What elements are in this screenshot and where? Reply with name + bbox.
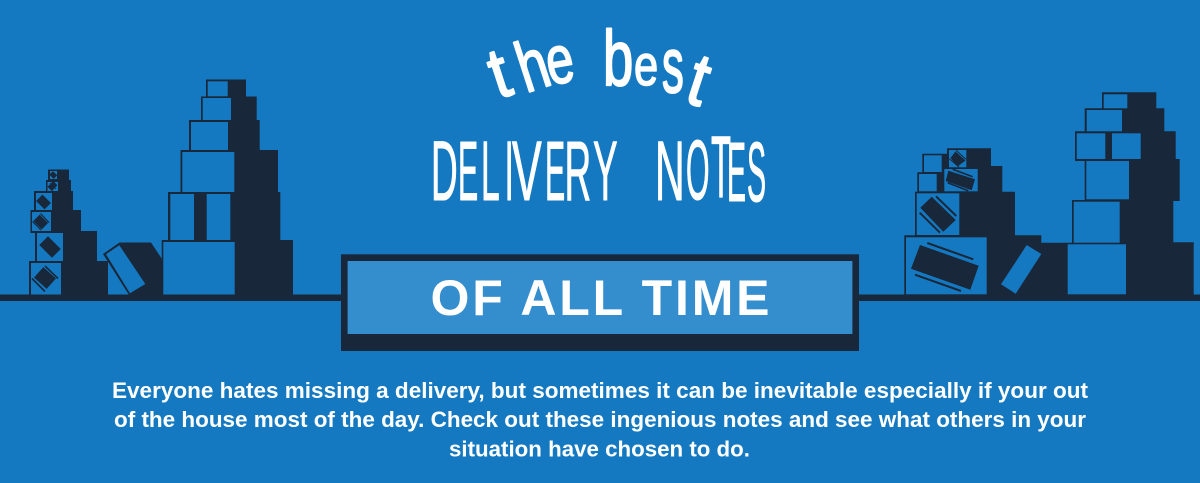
title: delivery notes: N <box>655 125 685 219</box>
ground line <box>0 294 1200 301</box>
intro paragraph: Everyone hates missing a delivery, but sometimes it can be inevitable especially if your out <box>112 378 1089 403</box>
illustration: tipped-over box right <box>1001 245 1041 294</box>
illustration: right-hand small stack boxes <box>906 150 987 294</box>
title: the best: e <box>539 19 579 100</box>
title: delivery notes: E <box>458 125 478 219</box>
title: the best: t <box>678 37 721 122</box>
intro paragraph: of the house most of the day. Check out these ingenious notes and see what others in your <box>114 407 1086 432</box>
banner: of all time <box>341 254 859 351</box>
banner text: OF ALL TIME <box>430 270 770 326</box>
title: delivery notes: S <box>747 126 766 220</box>
title: delivery notes: Y <box>593 124 618 218</box>
illustration: right stacks of boxes silhouette <box>904 92 1194 295</box>
title: delivery notes: D <box>431 124 458 218</box>
title: delivery notes: L <box>481 124 500 218</box>
title: the best: t <box>478 33 520 114</box>
title: delivery notes: E <box>545 125 565 219</box>
illustration: right-hand tall stack boxes <box>1068 94 1141 294</box>
title: delivery notes: O <box>686 124 710 218</box>
title: the best: h <box>506 23 559 108</box>
title: delivery notes: V <box>512 125 542 219</box>
intro paragraph: situation have chosen to do. <box>449 436 750 462</box>
illustration: tipped-over box left <box>103 242 162 295</box>
title: delivery notes: E <box>727 126 746 220</box>
intro paragraph <box>112 378 1089 462</box>
title: the best: e <box>634 33 658 97</box>
title: the best <box>478 15 721 122</box>
title: the best: s <box>662 23 684 109</box>
title: delivery notes: T <box>711 118 731 216</box>
illustration: small left stack of boxes <box>29 170 108 295</box>
illustration: tall left stack of boxes <box>162 80 293 295</box>
title: delivery notes: I <box>504 124 514 218</box>
title: delivery notes <box>431 118 766 220</box>
title: the best: b <box>603 15 633 102</box>
title: delivery notes: R <box>564 124 591 218</box>
